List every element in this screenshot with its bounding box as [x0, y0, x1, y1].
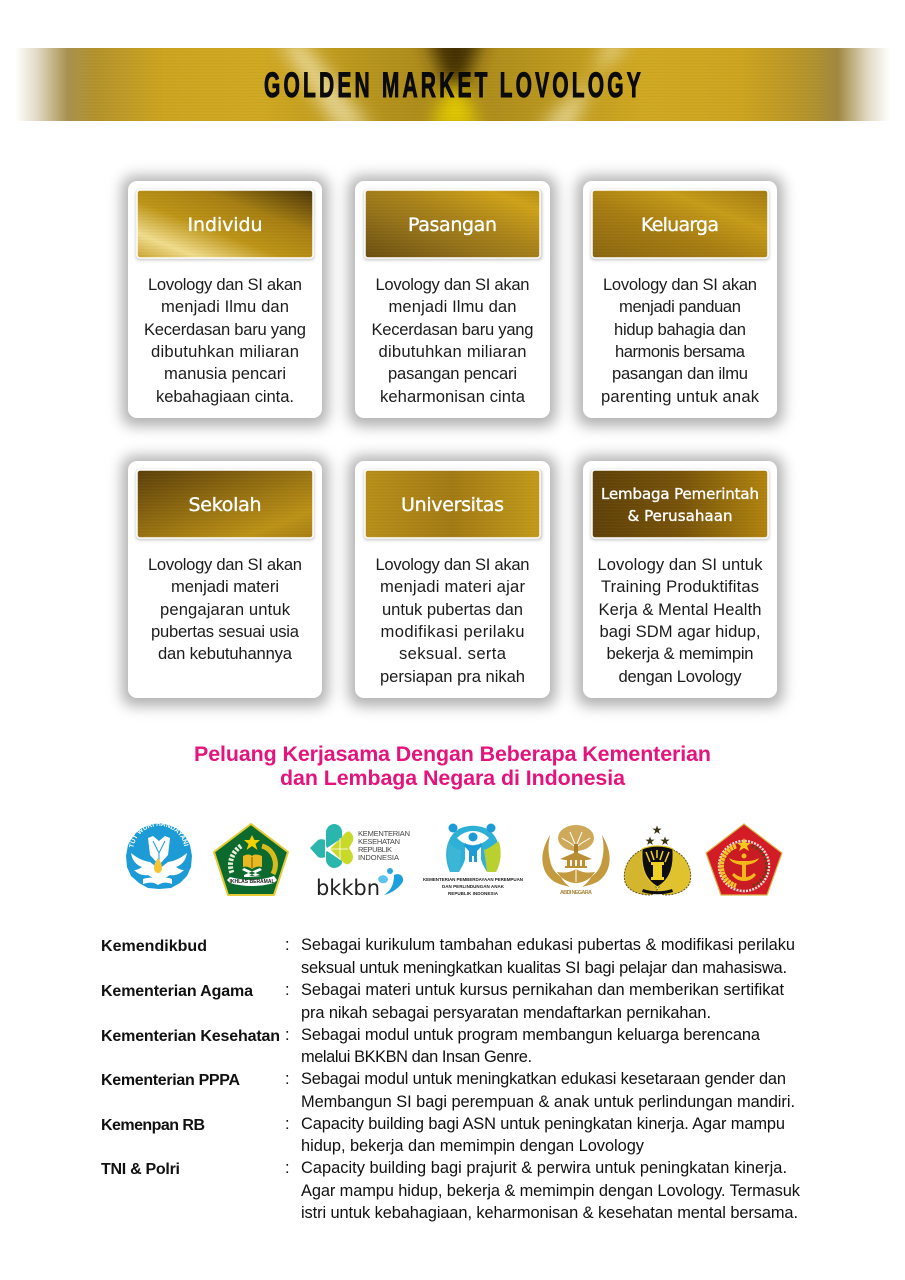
text: Individu description: Kecerdasan baru yang [144, 320, 306, 339]
text block: Kemenpan RB: Kemenpan RB [101, 1117, 205, 1134]
text block: Kemenpan RB: hidup, bekerja dan memimpin dengan Lovology [301, 1137, 645, 1155]
text block: Kementerian Agama: : [285, 981, 290, 999]
text: Keluarga description: Lovology dan SI akan [603, 275, 757, 294]
text: Individu description: menjadi Ilmu dan [161, 297, 289, 316]
heading: Universitas: Universitas [401, 494, 504, 516]
text: Pasangan description: dibutuhkan miliaran [378, 342, 526, 361]
icon: logo Polri [624, 823, 691, 895]
icon: logo TNI [706, 824, 782, 895]
text block: Kemendikbud: Sebagai kurikulum tambahan edukasi pubertas & modifikasi perilaku [301, 936, 795, 954]
text: Universitas description: Lovology dan SI akan [376, 555, 530, 574]
text: Lembaga description: bekerja & memimpin [606, 644, 754, 663]
text: Universitas description: untuk pubertas dan [382, 600, 523, 619]
text: Universitas description: persiapan pra nikah [380, 667, 525, 686]
icon: logo Kementerian Kesehatan and BKKBN: KEMENTERIAN [358, 829, 410, 838]
icon: logo ASN Abdi Negara [542, 825, 610, 896]
text block: Kementerian Kesehatan: : [285, 1026, 290, 1044]
text: Individu description: kebahagiaan cinta. [156, 387, 294, 406]
panel: Sekolah [122, 456, 328, 706]
text block: Kementerian Kesehatan [101, 1026, 761, 1066]
panel: Individu [122, 176, 328, 426]
icon: logo Kementerian PPPA [423, 824, 523, 896]
panel: Keluarga [577, 176, 783, 426]
text: Universitas description: seksual. serta [399, 644, 507, 663]
heading: Keluarga: Keluarga [641, 214, 719, 236]
text: Individu description [144, 275, 306, 406]
text: Sekolah description: dan kebutuhannya [158, 644, 293, 663]
text: Lembaga description: bagi SDM agar hidup, [600, 622, 760, 641]
text: Sekolah description: menjadi materi [171, 577, 279, 596]
text: Lembaga description: dengan Lovology [618, 667, 742, 686]
text block: TNI & Polri: istri untuk kebahagiaan, keharmonisan & kesehatan mental bersama. [301, 1204, 798, 1222]
heading: Peluang Kerjasama: dan Lembaga Negara di Indonesia [280, 766, 626, 790]
text: Pasangan description: Kecerdasan baru yang [372, 320, 534, 339]
text block: Kemenpan RB: : [285, 1115, 290, 1133]
text: Keluarga description [601, 275, 760, 406]
text block: Kemendikbud: : [285, 936, 290, 954]
text block: Kementerian PPPA: : [285, 1070, 290, 1088]
text block: Kementerian Agama: Kementerian Agama [101, 983, 253, 1000]
text: Keluarga description: harmonis bersama [615, 342, 746, 361]
icon: logo Polri: ★ [645, 834, 655, 848]
text: Pasangan description: menjadi Ilmu dan [388, 297, 516, 316]
text block: Kementerian Kesehatan: melalui BKKBN dan Insan Genre. [301, 1048, 532, 1066]
heading: Lembaga Pemerintah & Perusahaan [601, 485, 759, 525]
text block: Kemendikbud [101, 936, 795, 977]
text: Pasangan description: pasangan pencari [388, 364, 517, 383]
text block: TNI & Polri: Capacity building bagi prajurit & perwira untuk peningkatan kinerja. [301, 1159, 787, 1177]
icon: logo Kementerian PPPA: REPUBLIK INDONESIA [448, 891, 499, 896]
icon: logo Polri: ★ [652, 823, 662, 837]
panel: Universitas [349, 456, 556, 706]
heading: Peluang Kerjasama [194, 742, 711, 790]
icon: logo Kemendikbud Tut Wuri Handayani: TUT WURI HANDAYANI [128, 823, 189, 848]
text: Sekolah description: pubertas sesuai usia [151, 622, 300, 641]
icon: logo Kementerian PPPA: DAN PERLINDUNGAN ANAK [442, 884, 505, 889]
text block: TNI & Polri: Agar mampu hidup, bekerja & memimpin dengan Lovology. Termasuk [301, 1182, 801, 1200]
text block: Kemenpan RB [101, 1115, 785, 1155]
text: Keluarga description: hidup bahagia dan [614, 320, 746, 339]
title banner [18, 48, 887, 121]
text: Universitas description: modifikasi perilaku [380, 622, 524, 641]
text: Keluarga description: menjadi panduan [619, 297, 741, 316]
text block: Kemendikbud: seksual untuk meningkatkan kualitas SI bagi pelajar dan mahasiswa. [301, 959, 787, 977]
text: Pasangan description: Lovology dan SI akan [376, 275, 530, 294]
text block: Kementerian Kesehatan: Sebagai modul untuk program membangun keluarga berencana [301, 1026, 761, 1044]
text: Sekolah description [148, 555, 302, 663]
text block: Kementerian PPPA: Sebagai modul untuk meningkatkan edukasi kesetaraan gender dan [301, 1070, 786, 1088]
text block: TNI & Polri: TNI & Polri [101, 1161, 180, 1178]
icon: logo ASN Abdi Negara: ABDI NEGARA [560, 890, 592, 896]
icon: logo Kementerian Kesehatan and BKKBN: bkkbn [316, 876, 380, 900]
text block: Kementerian Agama [101, 981, 784, 1022]
icon: logo Kementerian Agama: IKHLAS BERAMAL [230, 879, 274, 885]
icon: logo Kementerian Kesehatan and BKKBN: REPUBLIK [358, 845, 392, 854]
text: Pasangan description: keharmonisan cinta [380, 387, 526, 406]
panel: Pasangan [349, 176, 556, 426]
text: Keluarga description: parenting untuk anak [601, 387, 760, 406]
icon: logo Kemendikbud Tut Wuri Handayani [126, 823, 192, 889]
text block: Kementerian PPPA: Membangun SI bagi perempuan & anak untuk perlindungan mandiri. [301, 1093, 795, 1111]
text: Lembaga description: Training Produktifitas [601, 577, 759, 596]
text: Universitas description [376, 555, 530, 686]
icon: logo Kementerian Kesehatan and BKKBN: INDONESIA [358, 853, 399, 862]
text: Lembaga description: Lovology dan SI untuk [598, 555, 763, 574]
heading: Peluang Kerjasama: Peluang Kerjasama Dengan Beberapa Kementerian [194, 742, 711, 766]
text block: Kemenpan RB: Capacity building bagi ASN untuk peningkatan kinerja. Agar mampu [301, 1115, 785, 1133]
icon: logo Kementerian Agama [214, 824, 288, 895]
text block: TNI & Polri [101, 1159, 801, 1222]
icon: logo Kementerian PPPA: KEMENTERIAN PEMBERDAYAAN PEREMPUAN [423, 877, 523, 882]
text block: Kementerian Agama: Sebagai materi untuk kursus pernikahan dan memberikan sertifikat [301, 981, 784, 999]
heading: Lembaga Pemerintah & Perusahaan: Lembaga Pemerintah [601, 485, 759, 503]
text: Individu description: manusia pencari [164, 364, 286, 383]
text block: Kemendikbud: Kemendikbud [101, 938, 207, 955]
text block: Kementerian Kesehatan: Kementerian Kesehatan [101, 1028, 280, 1045]
text: Sekolah description: Lovology dan SI akan [148, 555, 302, 574]
text: Individu description: dibutuhkan miliaran [151, 342, 299, 361]
text block: TNI & Polri: : [285, 1159, 290, 1177]
heading: Lembaga Pemerintah & Perusahaan: & Perusahaan [628, 507, 732, 525]
text: Lembaga description [598, 555, 763, 686]
heading: Individu: Individu [188, 214, 262, 236]
text: Individu description: Lovology dan SI akan [148, 275, 302, 294]
text: Pasangan description [372, 275, 534, 406]
text: Sekolah description: pengajaran untuk [160, 600, 291, 619]
text: Lembaga description: Kerja & Mental Health [598, 600, 762, 619]
panel: Lembaga Pemerintah & Perusahaan [577, 456, 783, 706]
heading: Pasangan: Pasangan [408, 214, 497, 236]
icon: logo Polri: ★ [660, 834, 670, 848]
icon: logo Kementerian Kesehatan and BKKBN [310, 824, 410, 900]
text block: Kementerian Agama: pra nikah sebagai persyaratan mendaftarkan pernikahan. [301, 1004, 711, 1022]
text block: Kementerian PPPA [101, 1070, 795, 1111]
heading: Sekolah: Sekolah [188, 494, 262, 516]
title: GOLDEN MARKET LOVOLOGY [264, 67, 641, 105]
text: Universitas description: menjadi materi ajar [380, 577, 525, 596]
text block: Kementerian PPPA: Kementerian PPPA [101, 1072, 240, 1089]
icon: logo Kementerian Kesehatan and BKKBN: KESEHATAN [358, 837, 400, 846]
text: Keluarga description: pasangan dan ilmu [612, 364, 748, 383]
